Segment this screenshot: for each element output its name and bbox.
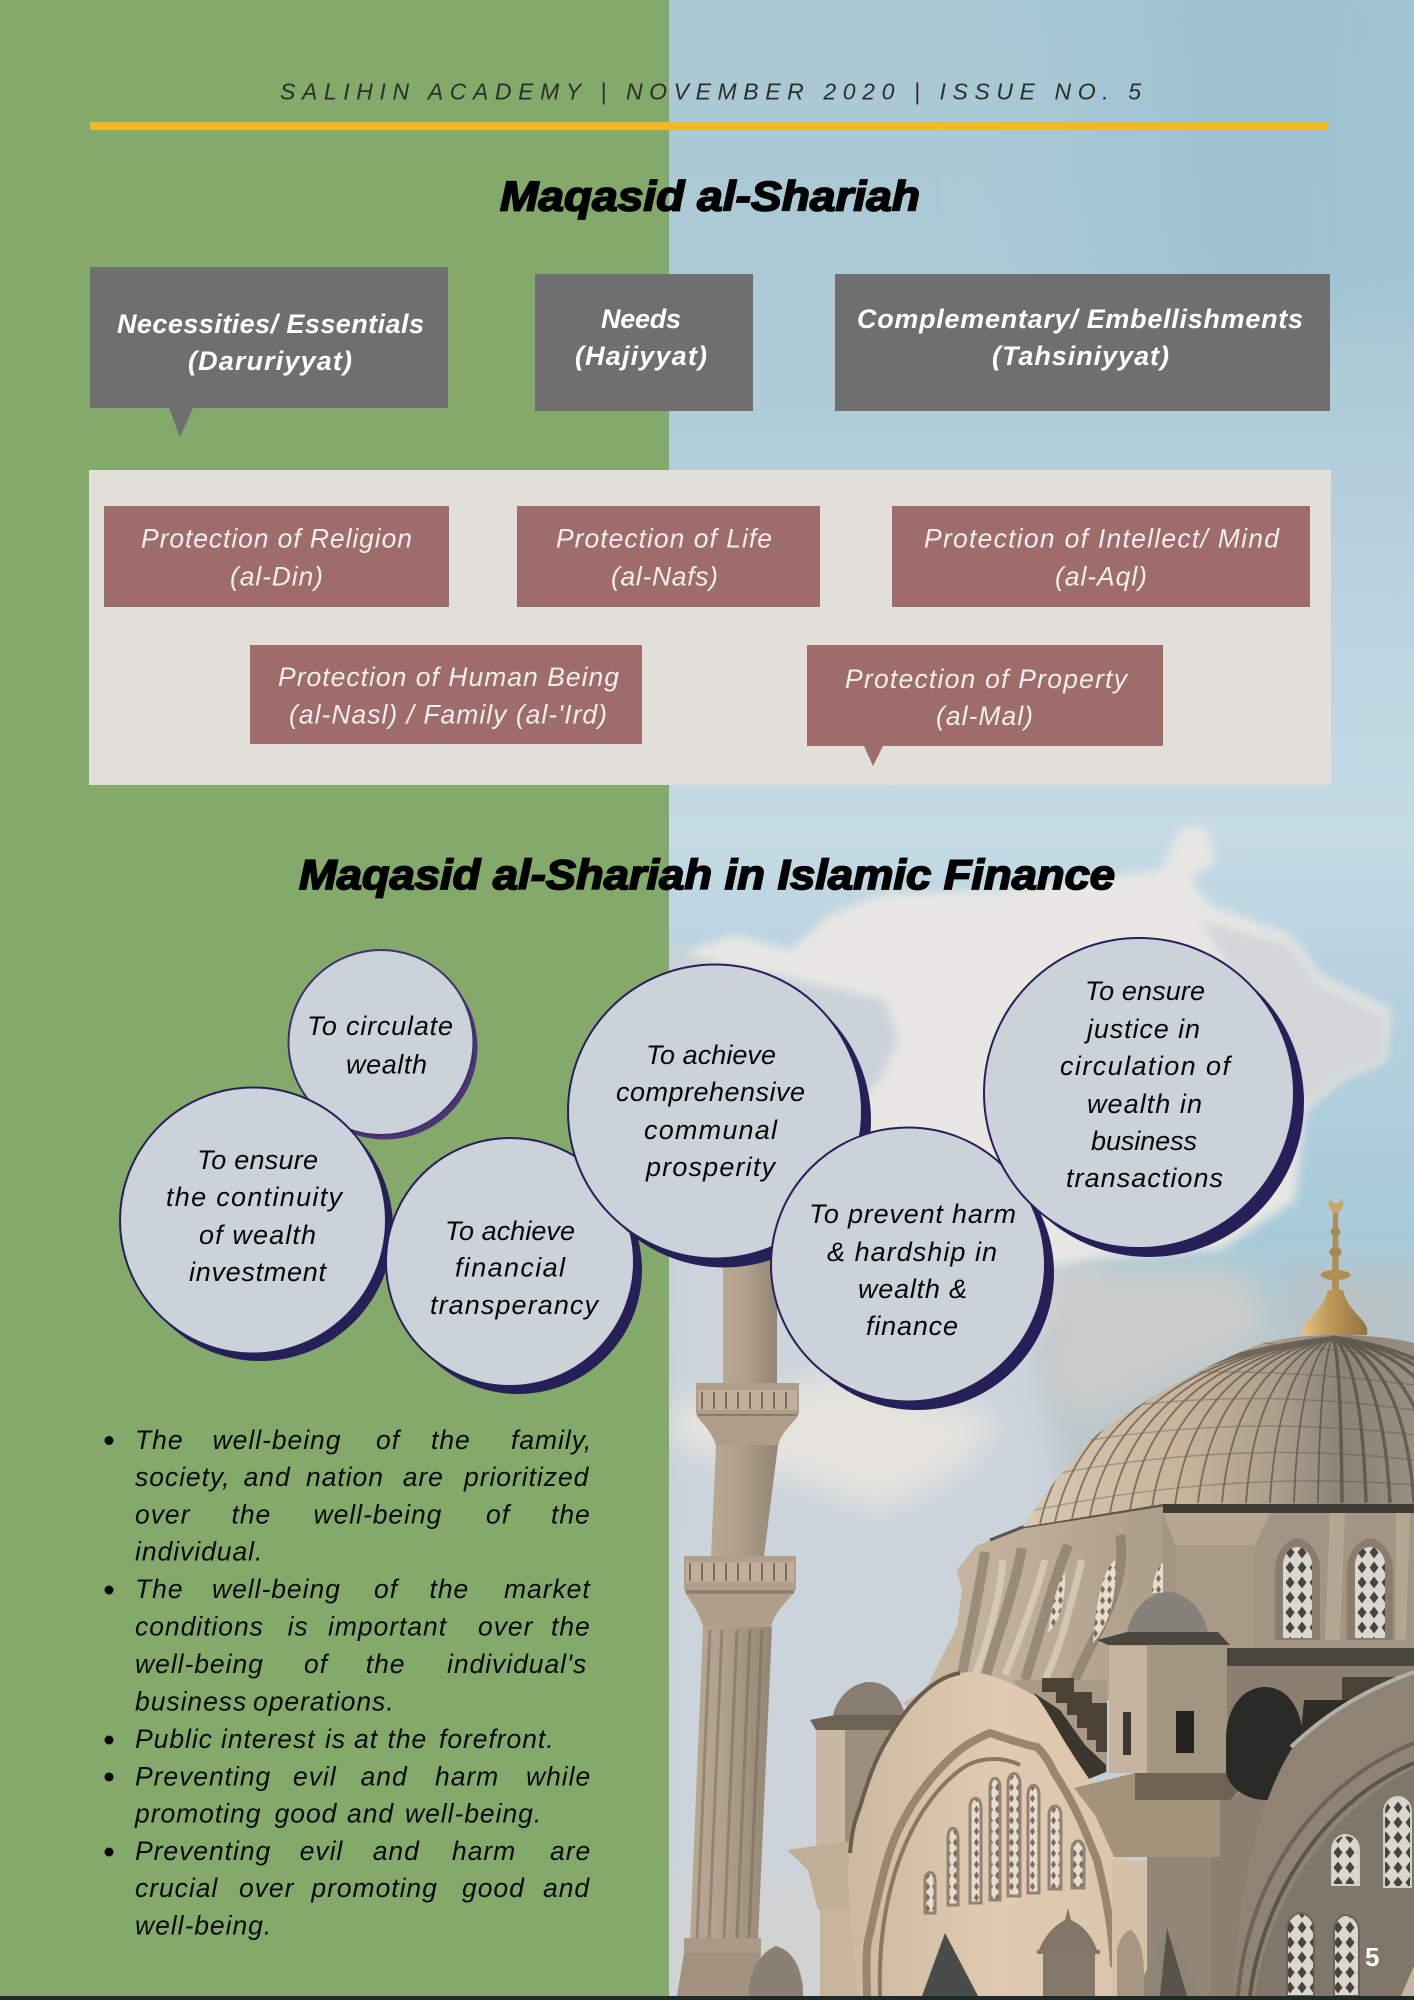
circle: justice in circulation: transactions xyxy=(1066,1163,1223,1193)
bullet: public interest xyxy=(104,1724,555,1754)
protection: property with pointer: (al-Mal) xyxy=(936,701,1033,731)
circle: circulate wealth: wealth xyxy=(346,1050,427,1080)
protection: life: (al-Nafs) xyxy=(611,562,718,592)
bullet: market conditions: the xyxy=(366,1649,406,1679)
protection: religion xyxy=(104,506,449,607)
circle: financial transparency xyxy=(386,1138,642,1394)
bullet: preventing evil while promoting good: harm xyxy=(435,1762,499,1792)
circle: justice in circulation: circulation of xyxy=(1060,1051,1232,1081)
circle: prevent harm: finance xyxy=(866,1311,958,1341)
circle: prevent harm: To prevent harm xyxy=(809,1199,1016,1229)
arch lancet windows xyxy=(925,1774,1084,1913)
circle: justice in circulation: justice in xyxy=(1083,1014,1200,1044)
bullet: market conditions xyxy=(104,1574,591,1716)
bullet: family, society and nation: the xyxy=(551,1500,591,1530)
bullet: family, society and nation: the xyxy=(431,1425,471,1455)
bullet: family, society and nation: of xyxy=(486,1500,512,1530)
circle: prevent harm xyxy=(771,1128,1054,1410)
circle: communal prosperity: comprehensive xyxy=(616,1077,805,1107)
finial xyxy=(1302,1197,1367,1335)
bullet: preventing evil is crucial: are xyxy=(550,1836,591,1866)
box: Necessities with pointer: Necessities/ Essentials xyxy=(117,309,424,339)
bullet: public interest: forefront. xyxy=(439,1724,555,1754)
circle: financial transparency: financial xyxy=(455,1252,566,1282)
circle: prevent harm: & hardship in xyxy=(827,1237,997,1267)
bullet: preventing evil is crucial xyxy=(104,1836,591,1940)
bullet: preventing evil is crucial: good xyxy=(462,1873,525,1903)
protection: intellect: Protection of Intellect/ Mind xyxy=(924,524,1280,554)
header line: academy, date and issue: SALIHIN ACADEMY | NOVEMBER 2020 | ISSUE NO. 5 xyxy=(280,78,1141,104)
bullet: family, society and nation xyxy=(104,1425,592,1566)
bullet: public interest: Public xyxy=(135,1724,213,1754)
bullet: market conditions: market xyxy=(504,1574,591,1604)
box: Needs: Needs xyxy=(601,304,681,334)
drum windows xyxy=(1275,1538,1393,1640)
bullet: family, society and nation: family, xyxy=(511,1425,592,1455)
bullet: family, society and nation: society, xyxy=(135,1462,230,1492)
right windows xyxy=(1287,1797,1411,1996)
circle: communal prosperity xyxy=(568,964,871,1268)
bullet: market conditions: conditions xyxy=(135,1612,264,1642)
circle: circulate wealth: To circulate xyxy=(307,1011,453,1041)
protection: human being and family xyxy=(250,645,642,744)
circle: continuity of wealth: To ensure xyxy=(197,1145,318,1175)
bullet: preventing evil is crucial: Preventing xyxy=(135,1836,271,1866)
circle: continuity of wealth: investment xyxy=(189,1257,327,1287)
bullet: preventing evil is crucial: harm xyxy=(452,1836,516,1866)
photo: mosque xyxy=(677,1197,1414,1996)
box: Necessities with pointer: (Daruriyyat) xyxy=(188,346,352,376)
cream arch wall xyxy=(848,1672,1147,1996)
circle: communal prosperity: communal xyxy=(644,1115,778,1145)
circle: financial transparency: To achieve xyxy=(445,1216,575,1246)
bullet: preventing evil while promoting good: and xyxy=(361,1762,408,1792)
bullet: preventing evil while promoting good: and xyxy=(347,1798,394,1828)
bullet: preventing evil while promoting good: Preventing xyxy=(135,1762,271,1792)
circle: continuity of wealth: of wealth xyxy=(199,1220,316,1250)
bullet: family, society and nation: well-being xyxy=(213,1425,341,1455)
protection: intellect: (al-Aql) xyxy=(1055,562,1147,592)
protection: religion: Protection of Religion xyxy=(141,524,412,554)
box: Necessities with pointer xyxy=(90,267,448,437)
bullet: preventing evil while promoting good: while xyxy=(526,1762,591,1792)
left corner tower xyxy=(787,1682,905,1996)
bullet list xyxy=(104,1425,592,1940)
protection: life xyxy=(517,506,820,607)
bullet: preventing evil is crucial: over xyxy=(239,1873,295,1903)
bullet: market conditions: well-being xyxy=(212,1574,341,1604)
centre tower xyxy=(1074,1592,1240,1970)
protection: property with pointer: Protection of Property xyxy=(845,664,1129,694)
circle: justice in circulation xyxy=(984,938,1304,1257)
bullet: family, society and nation: well-being xyxy=(314,1500,442,1530)
bullet: market conditions: of xyxy=(374,1574,400,1604)
dark arch recess xyxy=(1226,1687,1304,1800)
bullet: family, society and nation: the xyxy=(232,1500,271,1530)
bullet: preventing evil is crucial: and xyxy=(543,1873,590,1903)
protection: religion: (al-Din) xyxy=(230,562,323,592)
bullet: market conditions: operations. xyxy=(253,1686,395,1716)
circle: continuity of wealth: the continuity xyxy=(166,1182,344,1212)
box: Needs: (Hajiyyat) xyxy=(575,341,707,371)
bullet: market conditions: is xyxy=(288,1612,309,1642)
bullet: market conditions: individual's xyxy=(447,1649,587,1679)
bullet: market conditions: the xyxy=(430,1574,469,1604)
bullet: family, society and nation: individual. xyxy=(135,1536,263,1566)
circle: justice in circulation: business xyxy=(1091,1126,1197,1156)
bullet: family, society and nation: The xyxy=(135,1425,184,1455)
page number: 5 xyxy=(1365,1942,1379,1972)
bullet: family, society and nation: over xyxy=(135,1500,191,1530)
stepped roof xyxy=(1014,1678,1107,1785)
bullet: public interest: at xyxy=(354,1724,379,1754)
right wall behind xyxy=(1211,1666,1414,1996)
drum buttresses xyxy=(962,1505,1175,1680)
bottom dark strip xyxy=(0,1996,1414,2000)
panel: five protections xyxy=(89,470,1331,785)
protection: human being and family: Protection of Human Being xyxy=(278,662,619,692)
circle: circulate wealth xyxy=(288,950,478,1140)
protection: intellect xyxy=(892,506,1310,607)
bullet: preventing evil while promoting good xyxy=(104,1762,591,1828)
bullet: market conditions: The xyxy=(135,1574,184,1604)
hump and drum left xyxy=(903,1504,1163,1707)
circle: communal prosperity: prosperity xyxy=(645,1152,776,1182)
bullet: public interest: is xyxy=(325,1724,346,1754)
drum right xyxy=(1163,1513,1414,1648)
title: Maqasid al-Shariah in Islamic Finance: Maqasid al-Shariah in Islamic Finance xyxy=(299,851,1115,898)
bullet: market conditions: of xyxy=(304,1649,330,1679)
right arch xyxy=(1234,1672,1414,1996)
bullet: public interest: the xyxy=(388,1724,427,1754)
protection: life: Protection of Life xyxy=(556,524,772,554)
photo background: sky and clouds xyxy=(660,0,1414,2000)
box: Needs xyxy=(535,274,753,411)
small dome bottom xyxy=(749,1946,803,1996)
bullet: market conditions: important xyxy=(328,1612,448,1642)
bullet: preventing evil while promoting good: good xyxy=(275,1798,338,1828)
main dome xyxy=(1023,1335,1414,1527)
bullet: preventing evil while promoting good: promoting xyxy=(134,1798,261,1828)
minaret xyxy=(677,1240,799,1996)
bullet: family, society and nation: are xyxy=(403,1462,444,1492)
green left background xyxy=(0,0,669,2000)
bullet: family, society and nation: and xyxy=(244,1462,291,1492)
box: Complementary xyxy=(835,274,1330,411)
bullet: preventing evil is crucial: promoting xyxy=(310,1873,438,1903)
circle: prevent harm: wealth & xyxy=(858,1274,967,1304)
circle: justice in circulation: wealth in xyxy=(1087,1089,1202,1119)
bottom turrets and skylights xyxy=(922,1908,1414,1996)
box: Complementary: (Tahsiniyyat) xyxy=(992,341,1169,371)
circle: continuity of wealth xyxy=(120,1088,393,1361)
bullet: market conditions: the xyxy=(551,1612,591,1642)
protection: human being and family: (al-Nasl) / Family (al-'Ird) xyxy=(289,700,607,730)
bullet: preventing evil is crucial: evil xyxy=(300,1836,343,1866)
bullet: preventing evil while promoting good: well-being. xyxy=(405,1798,542,1828)
bullet: family, society and nation: prioritized xyxy=(463,1462,590,1492)
circle: financial transparency: transperancy xyxy=(430,1290,600,1320)
bullet: family, society and nation: of xyxy=(376,1425,402,1455)
bullet: family, society and nation: nation xyxy=(306,1462,384,1492)
bullet: public interest: interest xyxy=(221,1724,316,1754)
bullet: preventing evil is crucial: well-being. xyxy=(135,1910,272,1940)
circle: justice in circulation: To ensure xyxy=(1085,976,1205,1006)
box: Complementary: Complementary/ Embellishments xyxy=(857,304,1303,334)
bullet: preventing evil is crucial: and xyxy=(373,1836,420,1866)
bullet: market conditions: well-being xyxy=(135,1649,264,1679)
bullet: market conditions: business xyxy=(135,1686,247,1716)
bullet: preventing evil while promoting good: evil xyxy=(293,1762,337,1792)
yellow rule xyxy=(90,122,1328,130)
bullet: preventing evil is crucial: crucial xyxy=(135,1873,218,1903)
bullet: market conditions: over xyxy=(478,1612,534,1642)
protection: property with pointer xyxy=(807,645,1163,766)
title: Maqasid al-Shariah: Maqasid al-Shariah xyxy=(500,172,920,220)
circle: communal prosperity: To achieve xyxy=(646,1040,776,1070)
